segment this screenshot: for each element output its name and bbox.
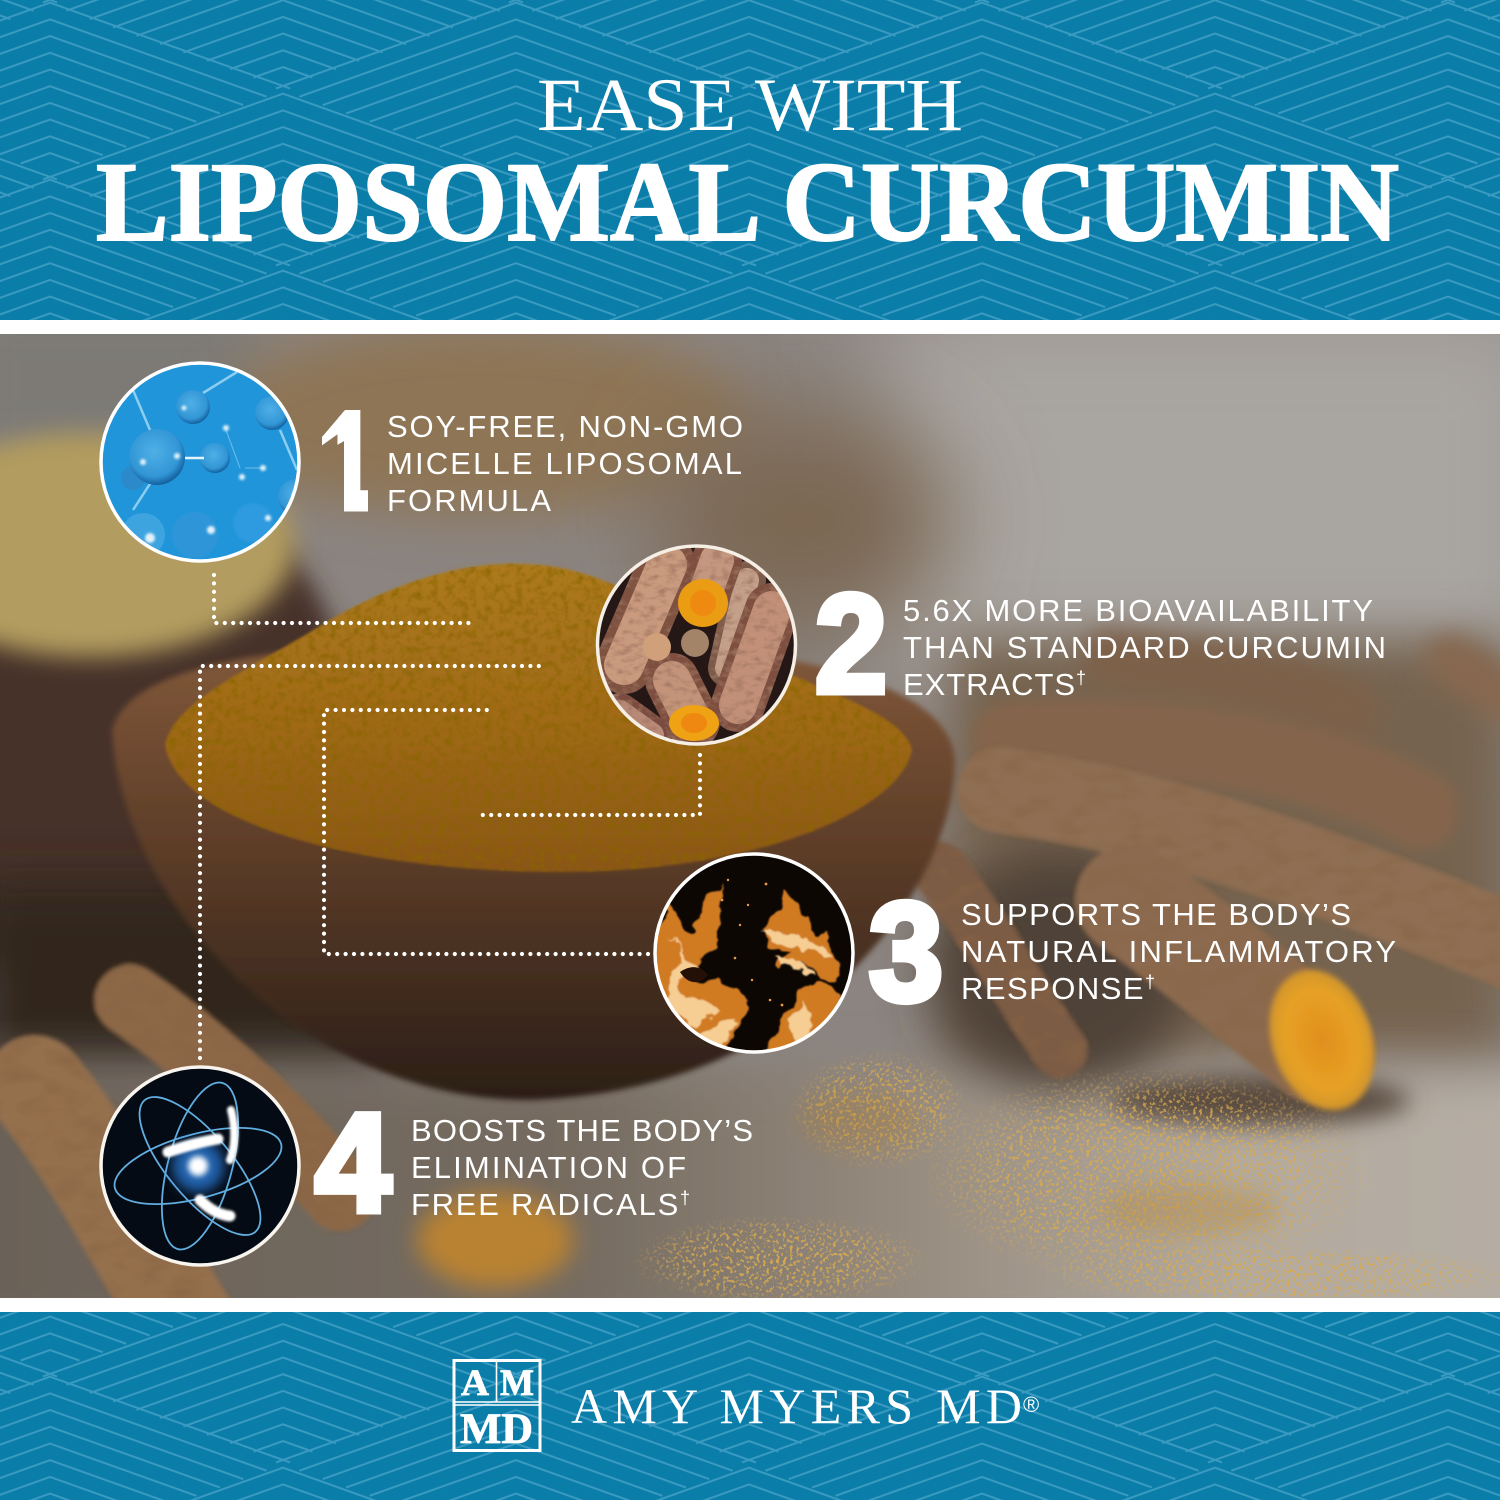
- text: item 2: 5.6X MORE BIOAVAILABILITY: [903, 593, 1373, 628]
- turmeric powder mound: [165, 564, 912, 872]
- main bowl: [112, 640, 955, 1100]
- icon: blue molecules: [100, 362, 314, 562]
- back-right roots: [940, 660, 1500, 1050]
- logo mark: MD: [460, 1406, 533, 1453]
- text: item 2: EXTRACTS: [903, 667, 1075, 702]
- text: item 1: SOY-FREE, NON-GMO: [387, 409, 743, 444]
- logo mark: M: [500, 1363, 534, 1404]
- footer band: [0, 1312, 1500, 1500]
- small cut root: [417, 1192, 573, 1288]
- photo panel: turmeric bowl: [0, 300, 1500, 1350]
- text: item 2: THAN STANDARD CURCUMIN: [903, 630, 1386, 665]
- text: item 1: [387, 409, 743, 518]
- title: [96, 64, 1399, 265]
- title line: LIPOSOMAL CURCUMIN: LIPOSOMAL CURCUMIN: [96, 140, 1399, 265]
- dotted connector lines: [200, 575, 700, 1058]
- text: item 3: [961, 897, 1396, 1006]
- text: item 3: NATURAL INFLAMMATORY: [961, 934, 1396, 969]
- icon: flames: [652, 853, 854, 1060]
- icon: turmeric roots: [596, 545, 797, 745]
- number 1: 1: [312, 381, 380, 538]
- text: item 3: RESPONSE: [961, 971, 1144, 1006]
- text: item 4: ELIMINATION OF: [411, 1150, 686, 1185]
- text: item 1: MICELLE LIPOSOMAL: [387, 446, 742, 481]
- brand name: ®: [1023, 1392, 1039, 1417]
- number 4: 4: [315, 1084, 391, 1241]
- text: item 1: FORMULA: [387, 483, 551, 518]
- brand name: AMY MYERS MD: [571, 1378, 1022, 1434]
- connector: item 1: [214, 575, 472, 623]
- title line: EASE WITH: EASE WITH: [537, 64, 963, 147]
- connector: item 2: [480, 755, 700, 815]
- cut root end: [1266, 966, 1378, 1114]
- back-left bowl: [0, 542, 344, 949]
- text: item 4: FREE RADICALS: [411, 1187, 678, 1222]
- number 2: 2: [815, 565, 887, 722]
- text: item 4: BOOSTS THE BODY’S: [411, 1113, 753, 1148]
- text: item 4: [411, 1113, 753, 1222]
- connector: item 3: [324, 710, 648, 954]
- logo mark: A: [461, 1363, 489, 1404]
- logo mark: [453, 1360, 541, 1453]
- connector: item 4: [200, 666, 542, 1058]
- front-left roots: [35, 1000, 340, 1330]
- spilled powder: [630, 1050, 1500, 1305]
- text: item 2: [903, 593, 1386, 702]
- text: item 4: †: [680, 1188, 690, 1208]
- text: item 2: †: [1076, 668, 1086, 688]
- number 3: 3: [869, 873, 943, 1030]
- text: item 3: †: [1145, 972, 1155, 992]
- floor: [0, 1070, 1500, 1350]
- header band: [0, 0, 1500, 320]
- text: item 3: SUPPORTS THE BODY’S: [961, 897, 1351, 932]
- icon: atom: [100, 1066, 300, 1266]
- powder grain: [165, 564, 912, 872]
